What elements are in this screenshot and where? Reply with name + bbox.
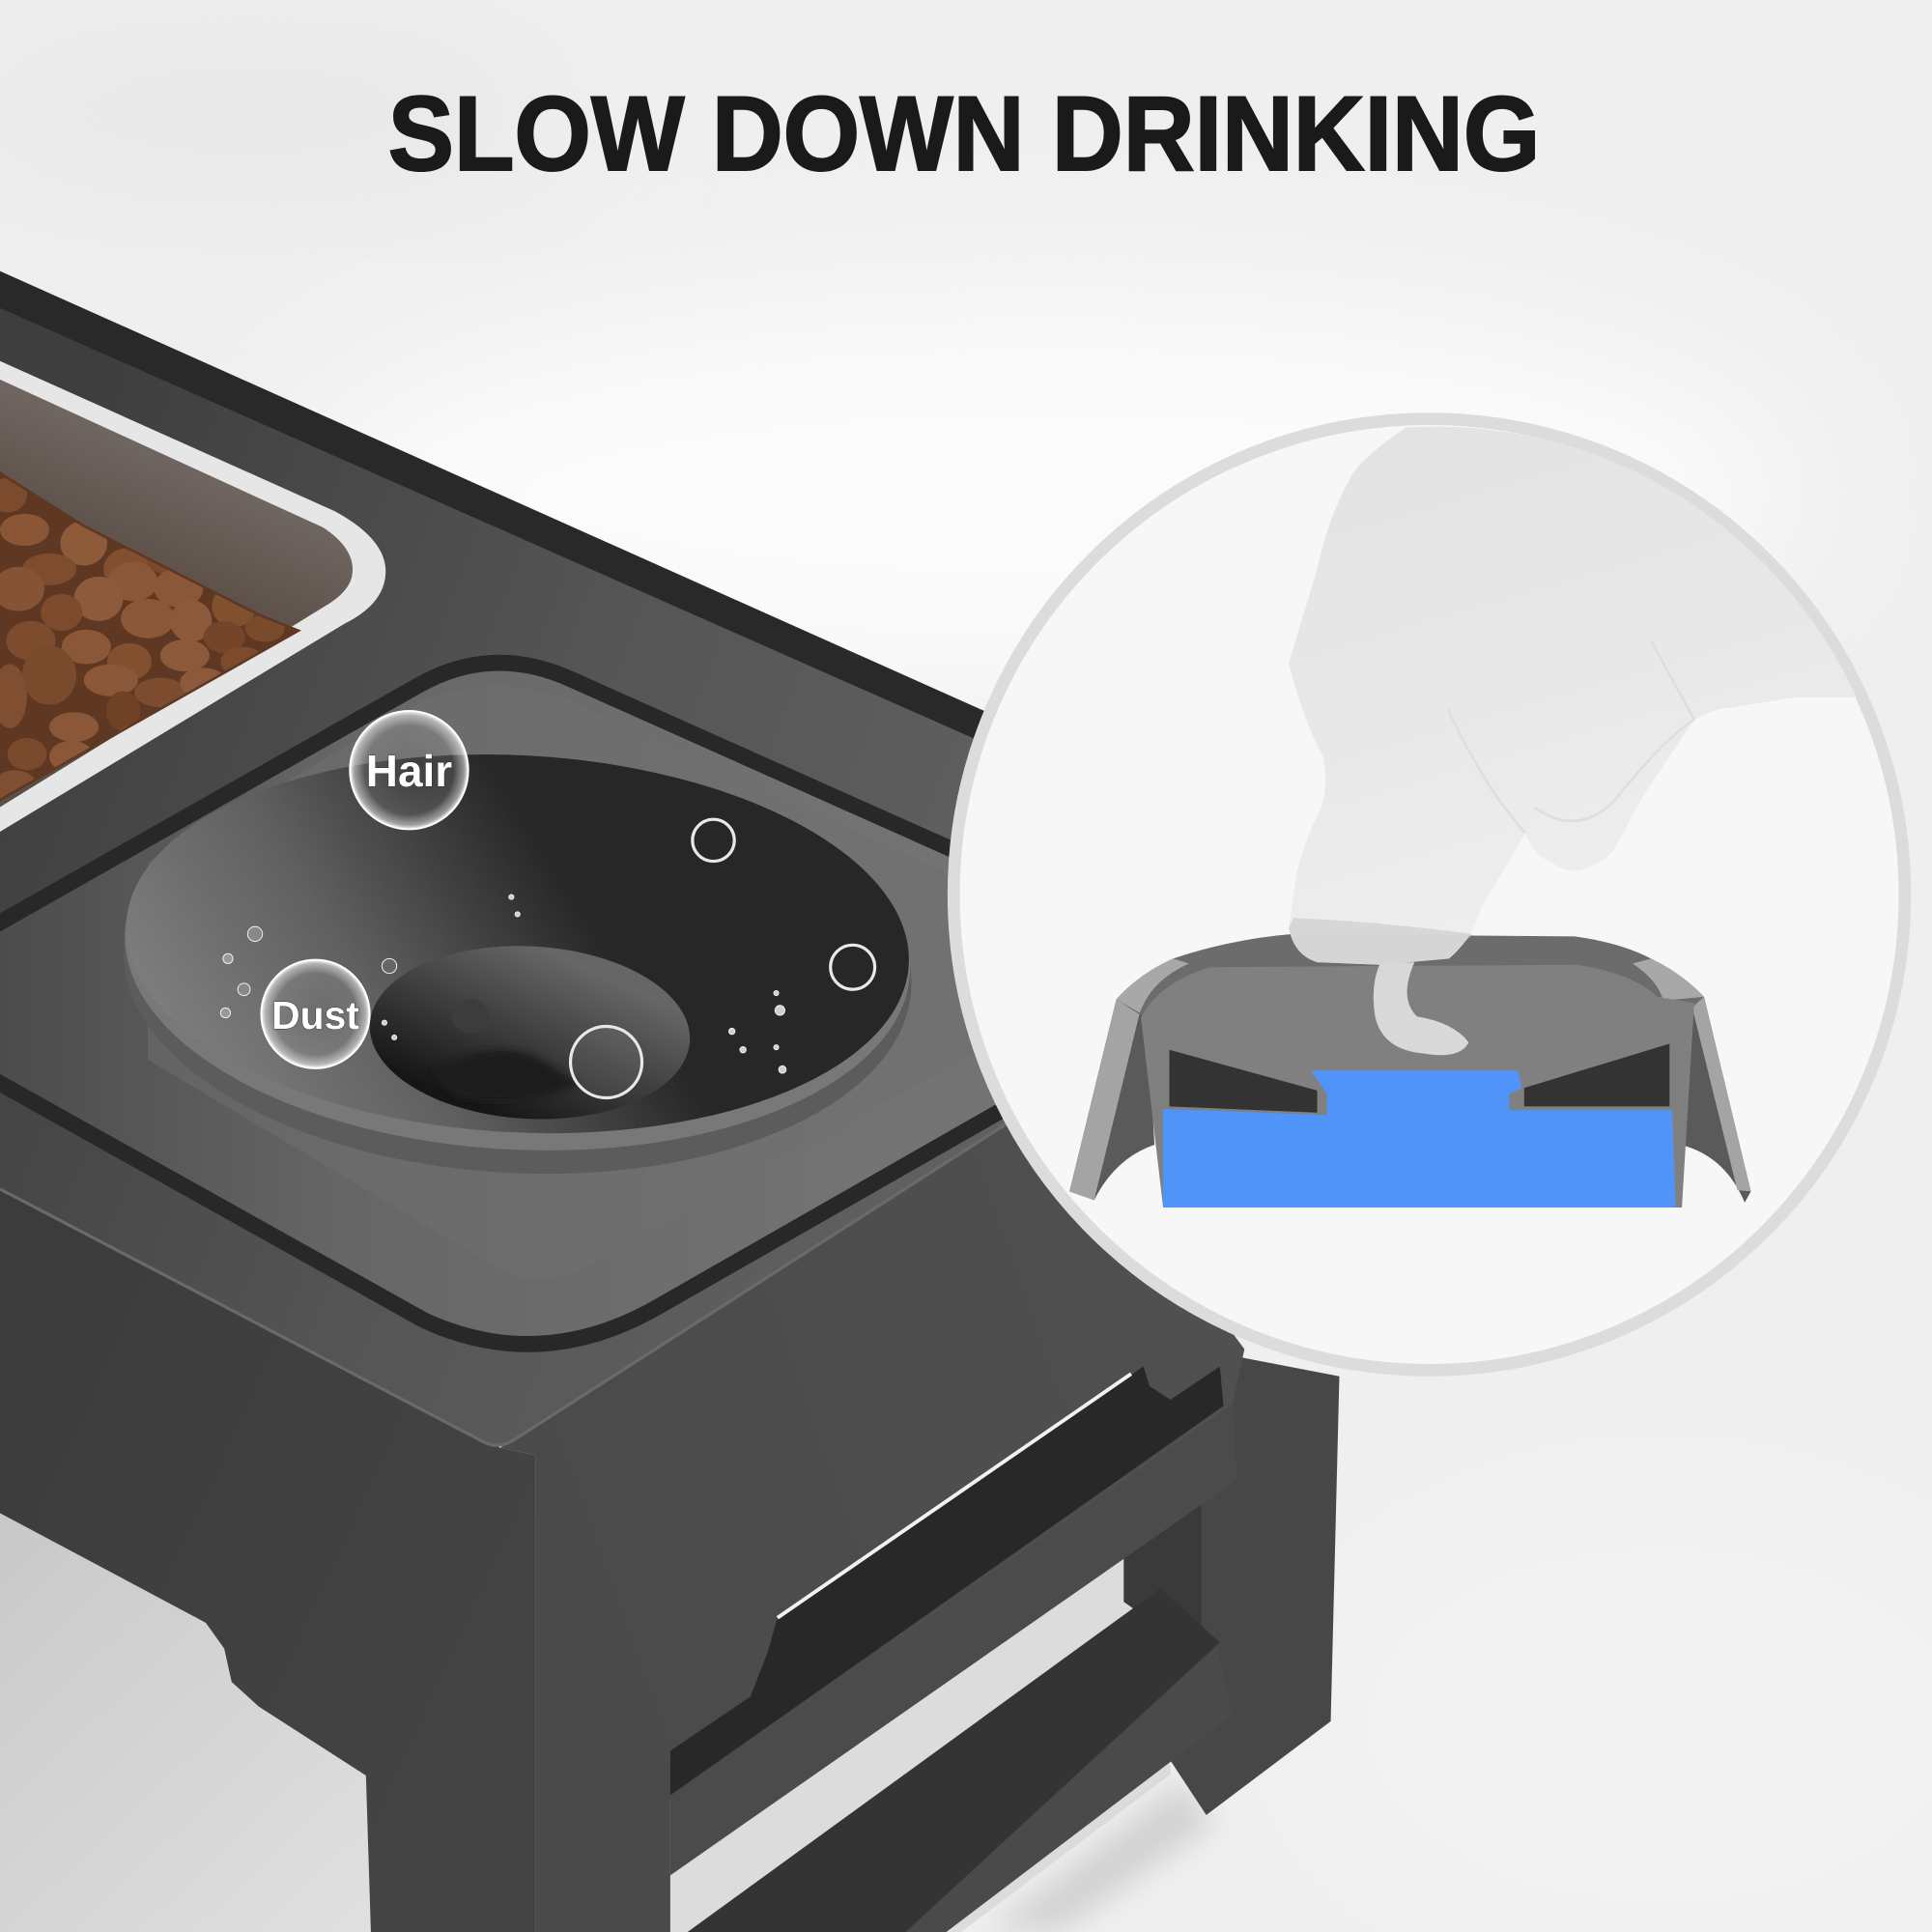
kibble [0, 478, 285, 802]
flared wall left [1069, 999, 1154, 1200]
callout circle: drinking cross-section [953, 419, 1905, 1370]
top plate rim [0, 271, 1047, 1109]
back right leg [1171, 1356, 1339, 1815]
floating disc [365, 938, 695, 1127]
inner leg column [1123, 1472, 1202, 1658]
height slot [670, 1367, 1224, 1795]
water surface [116, 735, 919, 1152]
water tray [0, 663, 1047, 1344]
water bowl rim [113, 744, 922, 1193]
lower rail [688, 1588, 1233, 1932]
bubble: Hair [350, 711, 469, 829]
bowl lip [1117, 934, 1704, 1015]
bubble: Dust [261, 960, 370, 1068]
tray groove [0, 663, 1047, 1344]
food bowl [0, 361, 385, 832]
left face [0, 1189, 536, 1932]
bubble: Hair: Hair [366, 746, 452, 796]
upper rail [670, 1401, 1237, 1875]
cat head [1289, 427, 1861, 1055]
bowl interior [0, 380, 353, 807]
dog feeder stand [0, 271, 1339, 1932]
tray inner panel [148, 686, 985, 1280]
dark cavity left [1169, 1050, 1318, 1113]
title: SLOW DOWN DRINKING [388, 75, 1540, 193]
bubble: Dust: Dust [271, 993, 359, 1037]
water droplets [220, 895, 786, 1073]
bowl top surface [1141, 965, 1694, 1208]
right face [500, 1084, 1244, 1932]
flared wall right [1681, 997, 1750, 1203]
cat tongue [1374, 962, 1468, 1055]
cross-section bowl [1069, 934, 1750, 1208]
steel rim [0, 361, 385, 832]
blue water [1163, 1070, 1676, 1208]
small bubbles [571, 819, 875, 1097]
top surface [0, 308, 1072, 1445]
dark cavity right [1524, 1043, 1669, 1106]
